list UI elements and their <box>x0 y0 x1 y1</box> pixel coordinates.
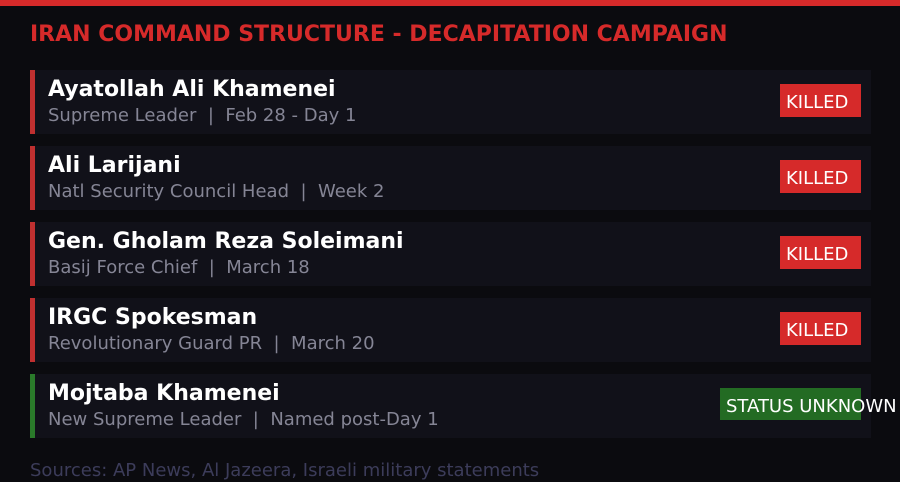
row: Khamenei <box>30 70 871 134</box>
subtitle: Basij Force Chief | March 18 <box>48 257 310 278</box>
sources: Sources: AP News, Al Jazeera, Israeli military statements <box>30 460 539 481</box>
badge <box>780 236 861 269</box>
badge <box>720 388 861 420</box>
name: IRGC Spokesman <box>48 305 257 330</box>
name: Ayatollah Ali Khamenei <box>48 77 336 102</box>
subtitle: Natl Security Council Head | Week 2 <box>48 181 384 202</box>
row: Soleimani <box>30 222 871 286</box>
badge <box>780 160 861 193</box>
badge: KILLED <box>786 320 848 341</box>
subtitle: New Supreme Leader | Named post-Day 1 <box>48 409 439 430</box>
badge <box>780 84 861 117</box>
name: Ali Larijani <box>48 153 181 178</box>
badge: KILLED <box>786 168 848 189</box>
badge: KILLED <box>786 92 848 113</box>
name: Mojtaba Khamenei <box>48 381 280 406</box>
name: Gen. Gholam Reza Soleimani <box>48 229 404 254</box>
subtitle: Revolutionary Guard PR | March 20 <box>48 333 375 354</box>
row: Larijani <box>30 146 871 210</box>
badge <box>780 312 861 345</box>
row: IRGC <box>30 298 871 362</box>
badge: KILLED <box>786 244 848 265</box>
row: Mojtaba <box>30 374 871 438</box>
title: IRAN COMMAND STRUCTURE - DECAPITATION CAMPAIGN <box>30 22 728 47</box>
badge: STATUS UNKNOWN <box>726 396 897 417</box>
subtitle: Supreme Leader | Feb 28 - Day 1 <box>48 105 356 126</box>
